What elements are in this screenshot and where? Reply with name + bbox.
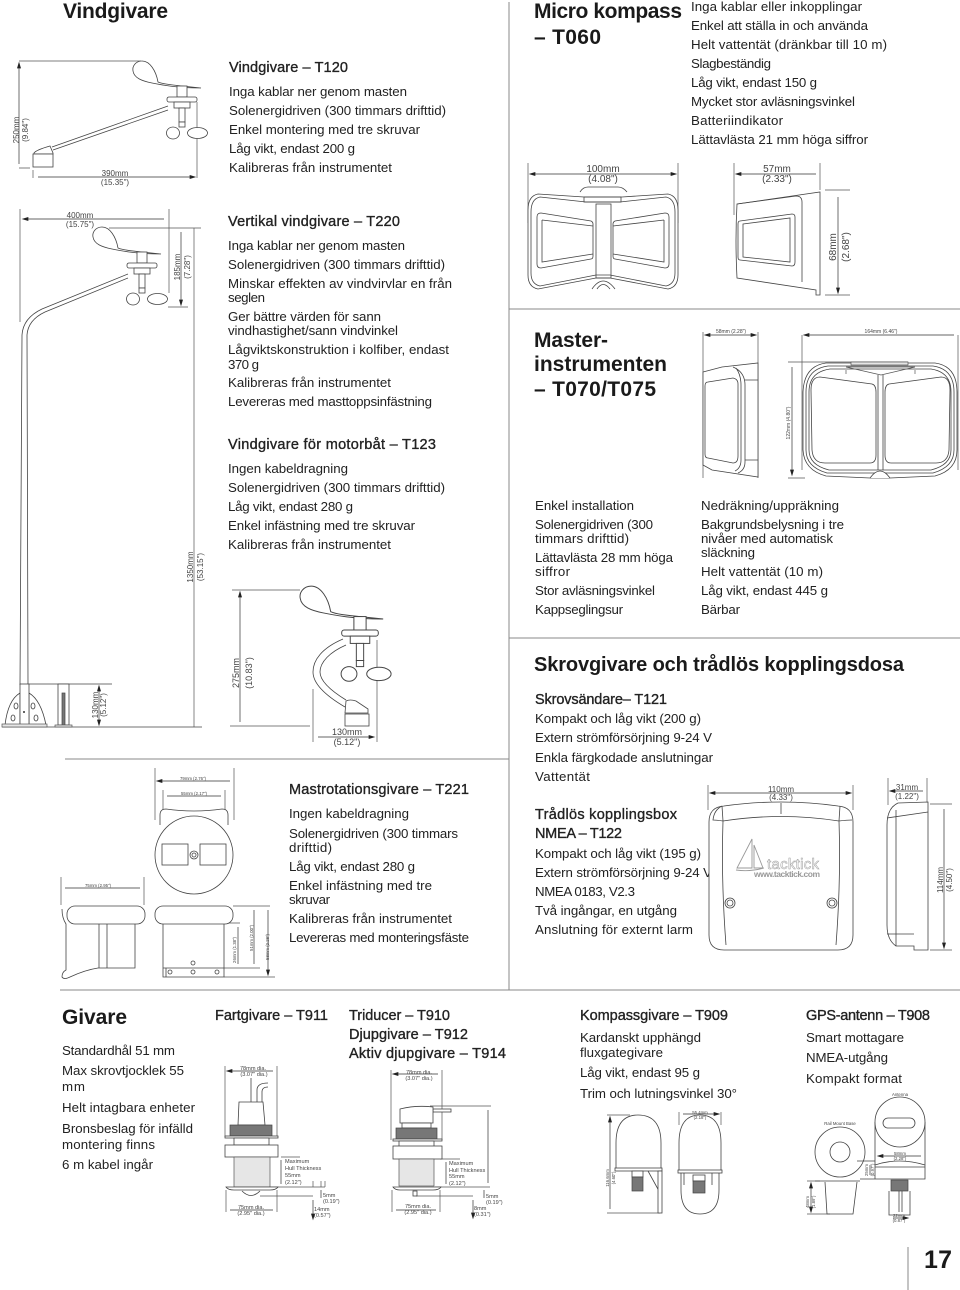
text block: T123 features: Ingen kabeldragning — [228, 461, 348, 476]
diagram: T221 mast rotation sensor: 75mm (2.95") — [85, 883, 112, 888]
diagram: wireless box side view — [887, 778, 954, 950]
diagram: T060 side view: (2.33") — [762, 174, 792, 185]
heading: Masterinstrumenten T070/T075: Master- — [534, 329, 608, 352]
text block: T908 features: NMEA-utgång — [806, 1050, 888, 1065]
diagram: wireless box front view — [708, 785, 853, 950]
diagram: T909 compass sensor: 116.6mm — [605, 1169, 610, 1187]
text block: T221 features: Kalibreras från instrumentet — [289, 911, 452, 926]
text block: T909 features: Låg vikt, endast 95 g — [580, 1065, 700, 1080]
diagram: mast base: (5.12") — [99, 693, 108, 717]
diagram: T120 wind sensor: (15.35") — [101, 178, 129, 187]
text block: T121 features: Kompakt och låg vikt (200 g) — [535, 711, 701, 726]
diagram: T911 speed sensor: (0.57") — [314, 1213, 331, 1219]
text block: T221 features: Enkel infästning med tre — [289, 878, 432, 893]
heading: Masterinstrumenten T070/T075: – T070/T075 — [534, 378, 656, 401]
diagram: T123 motorboat wind sensor: (5.12") — [334, 737, 360, 747]
text block: T123 features: Enkel infästning med tre skruvar — [228, 518, 416, 533]
text block: Givare features: montering finns — [62, 1137, 155, 1152]
diagram: T060 side view: 57mm — [763, 164, 791, 175]
diagram: T911 speed sensor: Hull Thickness — [285, 1166, 321, 1172]
text block: T221 features: Levereras med monteringsfäste — [289, 930, 469, 945]
text block: T220 features: Levereras med masttoppsinfästning — [228, 394, 432, 409]
diagram: T908 GPS antenna rail mount base — [805, 1121, 865, 1214]
diagram: mast base — [2, 684, 202, 727]
text block: Master features right: Bärbar — [701, 602, 741, 617]
diagram: T910 triducer: 55mm — [449, 1174, 465, 1180]
text block: T908 features: Kompakt format — [806, 1071, 902, 1086]
page number — [908, 1246, 952, 1290]
text block: T060 features: Slagbeständig — [691, 56, 771, 71]
diagram: T909 compass sensor — [605, 1110, 722, 1214]
text block: T122 features: NMEA – T122 — [535, 826, 622, 842]
text block: T121 features: Vattentät — [535, 769, 590, 784]
diagram: T120 wind sensor — [12, 61, 208, 187]
text block: T122 features: Två ingångar, en utgång — [535, 903, 677, 918]
text block: T060 features: Mycket stor avläsningsvinkel — [691, 94, 855, 109]
text block: T221 features: Solenergidriven (300 timmars — [289, 826, 458, 841]
text block: T220 features: Minskar effekten av vindvirvlar en från — [228, 276, 452, 291]
diagram: wireless box front view: tacktick — [767, 856, 820, 873]
diagram: T908 GPS antenna rail mount base: (1.89") — [811, 1195, 816, 1208]
diagram: T120 wind sensor: 250mm — [12, 116, 21, 143]
diagram: T220 masthead wind sensor: 400mm — [67, 211, 94, 220]
diagram: T070 front view: 122mm (4.80") — [786, 406, 792, 439]
diagram: T908 GPS antenna: 25mm — [864, 1164, 869, 1176]
text block: Master features right: nivåer med automatisk — [701, 531, 833, 546]
diagram: T060 side view: (2.68") — [841, 232, 852, 262]
text block: T122 features: Extern strömförsörjning 9-24 V — [535, 865, 712, 880]
diagram: T060 front view — [528, 163, 678, 289]
diagram: T910 triducer: (3.07" dia.) — [405, 1076, 433, 1082]
diagram: T911 speed sensor: (2.12") — [285, 1180, 302, 1186]
text block: T909 features: fluxgategivare — [580, 1045, 663, 1060]
heading: Masterinstrumenten T070/T075: instrumenten — [534, 353, 667, 376]
text block: T120 features: Kalibreras från instrumentet — [229, 160, 392, 175]
diagram: T070 front view: 164mm (6.46") — [865, 329, 898, 335]
text block: T221 features: Låg vikt, endast 280 g — [289, 859, 415, 874]
text block: T121 features: Extern strömförsörjning 9-24 V — [535, 730, 712, 745]
diagram: T911 speed sensor — [225, 1066, 340, 1219]
text block: Givare features: Max skrovtjocklek 55 — [62, 1063, 184, 1078]
text block: Master features right: Nedräkning/uppräkning — [701, 498, 839, 513]
text block: T220 features: Lågviktskonstruktion i kolfiber, endast — [228, 342, 449, 357]
diagram: T910 triducer: (2.95" dia.) — [404, 1210, 432, 1216]
diagram: T909 compass sensor: 55.4mm — [692, 1110, 708, 1115]
text block: T909 features: Kompassgivare – T909 — [580, 1008, 728, 1024]
text block: T120 features: Låg vikt, endast 200 g — [229, 141, 355, 156]
text block: T120 features: Solenergidriven (300 timmars drifttid) — [229, 103, 446, 118]
diagram: T910 triducer: Hull Thickness — [449, 1168, 485, 1174]
text block: T221 features: Mastrotationsgivare – T221 — [289, 782, 469, 798]
text block: Master features right: släckning — [701, 545, 755, 560]
diagram: T221 mast rotation sensor: 79mm (2.76") — [180, 776, 207, 781]
diagram: T911 speed sensor: (3.07" dia.) — [240, 1072, 268, 1078]
text block: T908 features: GPS-antenn – T908 — [806, 1008, 930, 1024]
text block: Givare features: mm — [62, 1079, 85, 1094]
text block: T220 features: Ger bättre värden för sann — [228, 309, 381, 324]
text block: T060 features — [691, 0, 887, 147]
text block: Givare features: Helt intagbara enheter — [62, 1100, 196, 1115]
diagram: T910 triducer — [391, 1070, 503, 1218]
text block: T220 features: Solenergidriven (300 timmars drifttid) — [228, 257, 445, 272]
diagram: T908 GPS antenna rail mount base: Rail Mount Base — [824, 1121, 856, 1126]
text block: T060 features: Låg vikt, endast 150 g — [691, 75, 817, 90]
diagram: wireless box front view: www.tacktick.com — [753, 869, 820, 879]
diagram: T911 speed sensor: 14mm — [314, 1207, 330, 1213]
heading: Micro kompass T060: Micro kompass — [534, 0, 682, 23]
text block: Givare features — [62, 1043, 196, 1172]
text block: T122 features: Trådlös kopplingsbox — [535, 807, 678, 823]
diagram: T908 GPS antenna: (0.87") — [893, 1218, 906, 1223]
text block: T123 features: Kalibreras från instrumentet — [228, 537, 391, 552]
text block: Givare features: Standardhål 51 mm — [62, 1043, 175, 1058]
diagram: T220 masthead wind sensor: 185mm — [173, 253, 182, 280]
section dividers — [60, 2, 960, 990]
text block: T122 features: Kompakt och låg vikt (195 g) — [535, 846, 701, 861]
heading: Masterinstrumenten T070/T075 — [534, 329, 667, 401]
text block: Givare features: Bronsbeslag för infälld — [62, 1121, 193, 1136]
heading: Skrovgivare och trådlös kopplingsdosa: Skrovgivare och trådlös kopplingsdosa — [534, 653, 905, 676]
text block: Master features left: Kappseglingsur — [535, 602, 624, 617]
text block: T121 features — [535, 692, 714, 784]
text block: T220 features: 370 g — [228, 357, 259, 372]
text block: T060 features: Lättavlästa 21 mm höga siffror — [691, 132, 869, 147]
text block: T220 features: Vertikal vindgivare – T220 — [228, 214, 400, 230]
diagram: T910 triducer: Maximum — [449, 1161, 474, 1167]
diagram: T221 mast rotation sensor: 51mm (2.00") — [249, 924, 254, 951]
diagram: T060 side view: 68mm — [828, 233, 839, 261]
diagram: wireless box side view: 114mm — [936, 867, 945, 893]
text block: T220 features: vindhastighet/sann vindvinkel — [228, 323, 398, 338]
text block: T221 features: drifttid) — [289, 840, 332, 855]
heading: Triducer, Djupgivare, Aktiv djupgivare: Aktiv djupgivare – T914 — [349, 1046, 506, 1062]
text block: T221 features: Ingen kabeldragning — [289, 806, 409, 821]
diagram: T123 motorboat wind sensor — [230, 586, 391, 747]
diagram: mast base: 130mm — [91, 691, 100, 718]
text block: Master features right — [701, 498, 844, 617]
diagram: T910 triducer: (2.12") — [449, 1181, 466, 1187]
text block: Master features left: Solenergidriven (300 — [535, 517, 653, 532]
diagram: T910 triducer: 78mm dia. — [406, 1070, 432, 1076]
text block: T120 features: Enkel montering med tre skruvar — [229, 122, 421, 137]
diagram: T060 front view: (4.08") — [588, 174, 618, 185]
heading: Triducer, Djupgivare, Aktiv djupgivare — [349, 1008, 506, 1062]
text block: T908 features — [806, 1008, 930, 1086]
diagram: T911 speed sensor: 55mm — [285, 1173, 301, 1179]
diagram: T060 side view — [734, 163, 852, 295]
text block: T122 features — [535, 807, 712, 937]
diagram: T908 GPS antenna: 22mm — [893, 1213, 905, 1218]
heading: Triducer, Djupgivare, Aktiv djupgivare: Triducer – T910 — [349, 1008, 450, 1024]
text block: T220 features: seglen — [228, 290, 265, 305]
heading: Micro kompass T060 — [534, 0, 682, 49]
diagram: T908 GPS antenna — [857, 1092, 925, 1223]
diagram: T911 speed sensor: (0.19") — [323, 1199, 340, 1205]
diagram: T911 speed sensor: 5mm — [323, 1193, 336, 1199]
text block: Master features right: Bakgrundsbelysning i tre — [701, 517, 844, 532]
diagram: T909 compass sensor: (4.60") — [611, 1171, 616, 1184]
diagram: T908 GPS antenna: (0.97") — [870, 1163, 875, 1176]
text block: T060 features: Helt vattentät (dränkbar till 10 m) — [691, 37, 887, 52]
diagram: T911 speed sensor: (2.95" dia.) — [237, 1211, 265, 1217]
diagram: T908 GPS antenna: (2.28") — [894, 1156, 907, 1161]
heading: Fartgivare T911: Fartgivare – T911 — [215, 1008, 328, 1024]
diagram: T120 wind sensor: (9.84") — [21, 118, 30, 142]
text block: T908 features: Smart mottagare — [806, 1030, 904, 1045]
text block: T060 features: Enkel att ställa in och använda — [691, 18, 869, 33]
diagram: T220 masthead wind sensor — [20, 209, 205, 727]
diagram: T120 wind sensor: 390mm — [102, 169, 129, 178]
text block: T123 features: Solenergidriven (300 timmars drifttid) — [228, 480, 445, 495]
diagram: wireless box side view: 31mm — [896, 783, 918, 792]
diagram: T123 motorboat wind sensor: 275mm — [231, 658, 241, 688]
text block: T220 features: Kalibreras från instrumentet — [228, 375, 391, 390]
text block: T122 features: NMEA 0183, V2.3 — [535, 884, 635, 899]
text block: Master features left: Enkel installation — [535, 498, 634, 513]
diagram: T220 masthead wind sensor: (15.75") — [66, 220, 94, 229]
text block: Master features left: siffror — [535, 564, 571, 579]
diagram: T910 triducer: 8mm — [474, 1206, 487, 1212]
diagram: T221 mast rotation sensor: 58mm (2.28") — [265, 933, 270, 960]
text block: T909 features: Trim och lutningsvinkel 30° — [580, 1086, 737, 1101]
text block: T220 features: Inga kablar ner genom masten — [228, 238, 405, 253]
diagram: T220 masthead wind sensor: (53.15") — [196, 553, 205, 581]
diagram: wireless box side view: (1.22") — [895, 792, 919, 801]
text block: Master features left: timmars drifttid) — [535, 531, 629, 546]
text block: T123 features: Låg vikt, endast 280 g — [228, 499, 353, 514]
page number: 17 — [924, 1246, 952, 1274]
text block: T220 features — [228, 214, 452, 409]
diagram: T910 triducer: (0.31") — [474, 1212, 491, 1218]
diagram: wireless box front view: (4.33") — [769, 793, 793, 802]
text block: T120 features — [229, 60, 446, 175]
diagram: T221 mast rotation sensor — [61, 768, 275, 978]
text block: Master features right: Helt vattentät (10 m) — [701, 564, 823, 579]
diagram: T221 mast rotation sensor: 26mm (1.38") — [232, 936, 237, 963]
diagram: T220 masthead wind sensor: (7.28") — [183, 255, 192, 279]
diagram: T123 motorboat wind sensor: 130mm — [332, 727, 362, 737]
text block: T909 features: Kardanskt upphängd — [580, 1030, 701, 1045]
diagram: T070 side view — [703, 329, 758, 478]
text block: T121 features: Skrovsändare– T121 — [535, 692, 667, 708]
diagram: T070 side view: 58mm (2.28") — [716, 329, 746, 335]
text block: T120 features: Inga kablar ner genom masten — [229, 84, 407, 99]
diagram: T220 masthead wind sensor: 1350mm — [186, 551, 195, 583]
text block: T221 features: skruvar — [289, 892, 331, 907]
text block: Master features left — [535, 498, 674, 617]
text block: T120 features: Vindgivare – T120 — [229, 60, 348, 76]
diagram: T908 GPS antenna: Antenna — [892, 1092, 909, 1097]
diagram: T060 front view: 100mm — [586, 164, 620, 175]
text block: Givare features: 6 m kabel ingår — [62, 1157, 154, 1172]
diagram: T123 motorboat wind sensor: (10.83") — [244, 657, 254, 689]
text block: T123 features: Vindgivare för motorbåt – T123 — [228, 437, 436, 453]
heading: Micro kompass T060: – T060 — [534, 26, 601, 49]
text block: T121 features: Enkla färgkodade anslutningar — [535, 750, 714, 765]
diagram: wireless box front view: 110mm — [768, 785, 794, 794]
diagram: T910 triducer: (0.19") — [486, 1200, 503, 1206]
heading: Vindgivare: Vindgivare — [63, 0, 168, 23]
diagram: T911 speed sensor: 78mm dia. — [240, 1066, 266, 1072]
diagram: T909 compass sensor: (2.18") — [694, 1115, 707, 1120]
diagram: T910 triducer: 75mm dia. — [405, 1204, 431, 1210]
text block: T060 features: Batteriindikator — [691, 113, 784, 128]
diagram: T911 speed sensor: Maximum — [285, 1159, 310, 1165]
diagram: wireless box side view: (4.50") — [945, 868, 954, 892]
heading: Triducer, Djupgivare, Aktiv djupgivare: Djupgivare – T912 — [349, 1027, 468, 1043]
diagram: T908 GPS antenna rail mount base: 48mm — [805, 1196, 810, 1208]
diagram: T070 front view — [786, 329, 958, 478]
diagram: T911 speed sensor: 75mm dia. — [238, 1205, 264, 1211]
diagram: T908 GPS antenna: 58mm — [894, 1151, 906, 1156]
text block: T122 features: Anslutning för externt larm — [535, 922, 693, 937]
text block: Master features right: Låg vikt, endast 445 g — [701, 583, 828, 598]
text block: Master features left: Lättavlästa 28 mm höga — [535, 550, 674, 565]
diagram: T910 triducer: 5mm — [486, 1194, 499, 1200]
text block: T123 features — [228, 437, 445, 552]
text block: Master features left: Stor avläsningsvinkel — [535, 583, 655, 598]
text block: T221 features — [289, 782, 469, 945]
text block: T909 features — [580, 1008, 737, 1101]
heading: Givare: Givare — [62, 1006, 127, 1029]
diagram: T221 mast rotation sensor: 55mm (2.17") — [181, 791, 208, 796]
